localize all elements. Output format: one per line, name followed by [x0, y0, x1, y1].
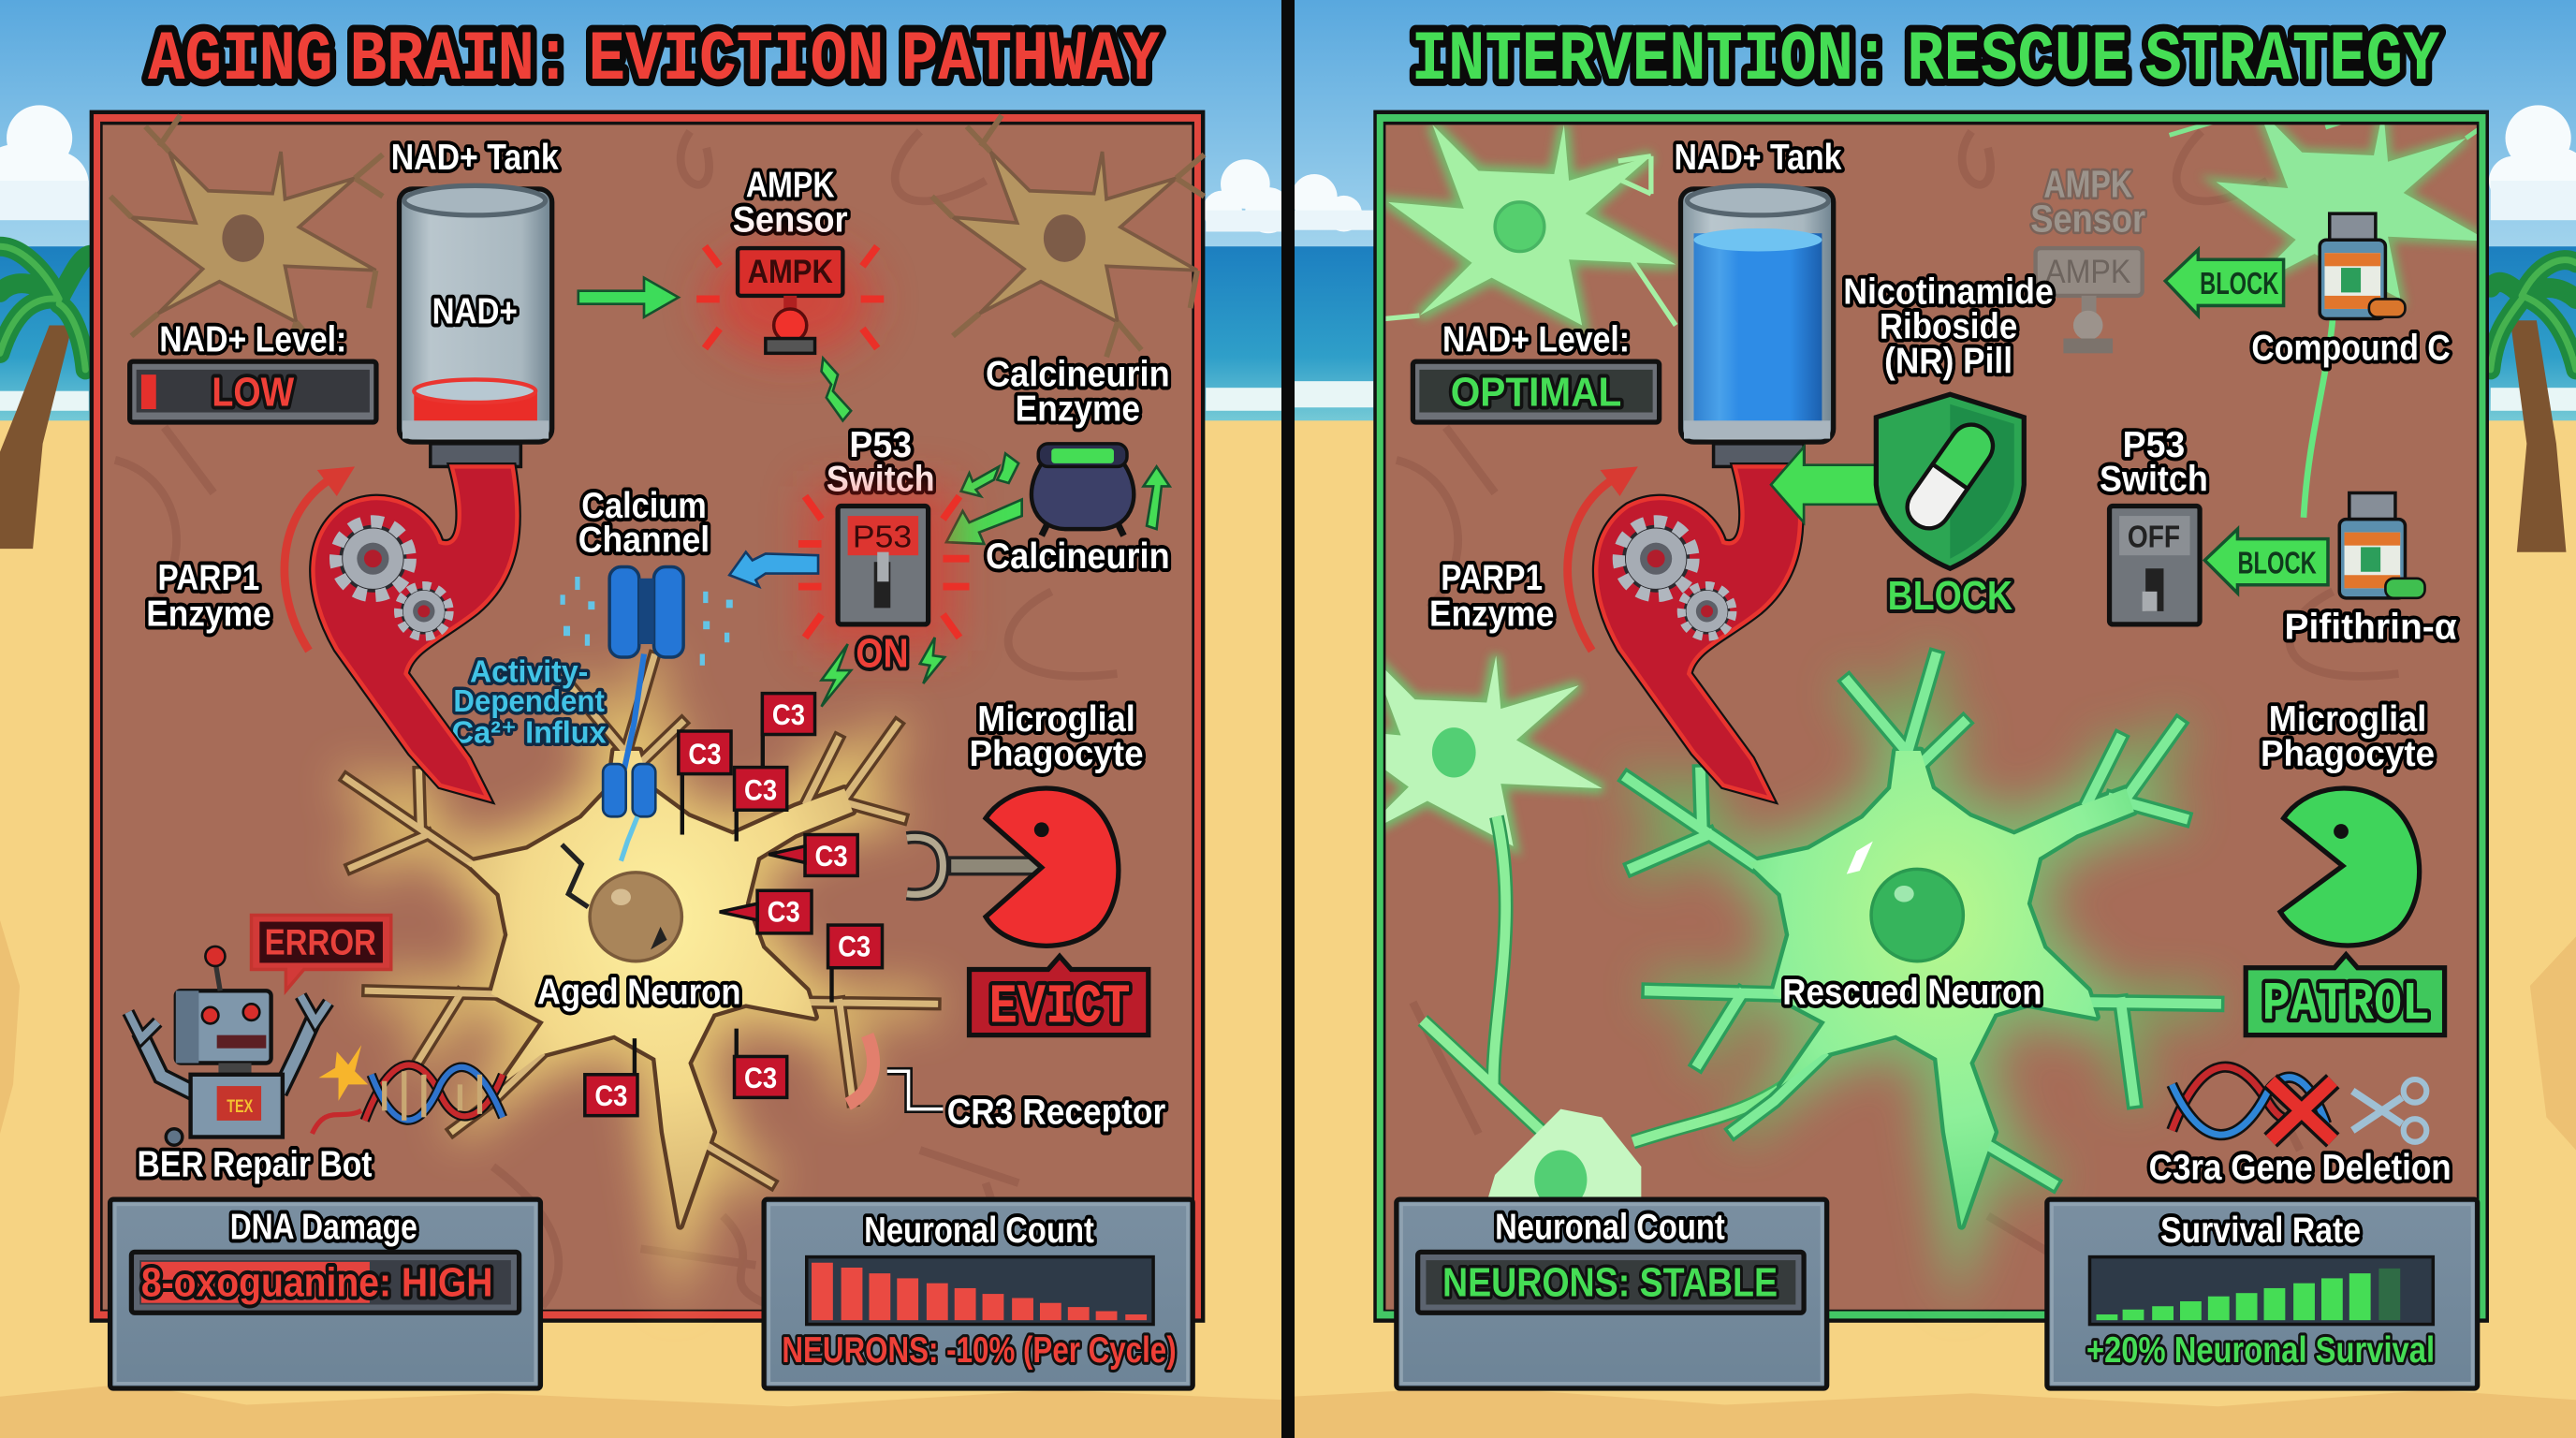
label: AMPK sensor inactive: AMPK: [2043, 163, 2132, 206]
faded neuron top right: [932, 115, 1204, 357]
faded neuron left: [43, 626, 324, 900]
label: ON: ON: [856, 631, 909, 677]
icon: C3ra gene deletion: [2172, 1067, 2426, 1142]
label: PARP1 enzyme: Enzyme: [146, 594, 271, 635]
label: activity-dependent calcium influx: [452, 654, 607, 750]
panel: DNA damage: DNA Damage: [230, 1207, 417, 1247]
icon: palm tree right: [2491, 260, 2576, 552]
C3 tags: C3: [838, 929, 871, 962]
panel frame: [1373, 110, 2489, 1323]
label: activity-dependent calcium influx: Activity-: [470, 654, 588, 689]
gauge: NAD+ optimal: [1412, 361, 1660, 422]
badge: error: [252, 916, 391, 990]
clouds: [0, 105, 2576, 233]
icon: BER repair bot: [128, 946, 368, 1145]
icon: CR3 receptor: [848, 1035, 943, 1109]
label: compound C: Compound C: [2251, 328, 2451, 368]
C3 tags: C3: [772, 697, 805, 731]
icons: lightning on: [822, 638, 944, 707]
label: nicotinamide riboside pill: Nicotinamide: [1843, 272, 2054, 313]
panel: survival rate: +20% Neuronal Survival: [2086, 1330, 2435, 1371]
label: PARP1 enzyme: [146, 558, 271, 635]
panel: DNA damage: [110, 1199, 540, 1388]
label: NAD+ tank: NAD+ Tank: [1674, 138, 1842, 178]
icon: P53 switch on: [798, 486, 970, 651]
label: nicotinamide riboside pill: Riboside: [1880, 307, 2017, 347]
label: nicotinamide riboside pill: (NR) Pill: [1884, 341, 2012, 381]
title: aging brain: AGING BRAIN: EVICTION PATHWAY: [148, 20, 1161, 100]
badge: patrol: PATROL: [2262, 975, 2430, 1035]
arrow: block AMPK: BLOCK: [2200, 267, 2278, 301]
icon: compound C bottle: [2320, 213, 2405, 318]
C3 tags: C3: [744, 1061, 777, 1094]
panel: neuronal count stable: Neuronal Count: [1495, 1207, 1725, 1247]
aged neuron: [346, 657, 935, 1225]
label: rescued neuron: Rescued Neuron: [1782, 972, 2042, 1012]
label: NAD+ tank: NAD+ Tank: [391, 138, 559, 178]
icon: PARP1 enzyme: [285, 466, 518, 799]
icon: microglia red: [986, 788, 1119, 946]
badge: evict: EVICT: [989, 976, 1131, 1039]
icon: AMPK sensor inactive: AMPK: [2045, 254, 2131, 290]
icon: pifithrin bottle: [2339, 493, 2425, 598]
label: calcium channel: Calcium: [581, 486, 707, 526]
panel: DNA damage: 8-oxoguanine: HIGH: [141, 1260, 493, 1306]
panel: neuronal count decline: NEURONS: -10% (Per Cycle): [782, 1330, 1177, 1371]
brain tissue cracks: [115, 131, 1117, 1306]
label: calcineurin enzyme: [986, 354, 1170, 429]
label: activity-dependent calcium influx: Ca²⁺ Influx: [452, 715, 607, 750]
icon: receptor in mouth: [907, 837, 1045, 894]
bar chart: declining neurons: [807, 1257, 1153, 1325]
arrow: block P53: [2204, 529, 2328, 594]
icon: palm tree left: [0, 246, 92, 549]
label: calcineurin: Calcineurin: [986, 536, 1170, 577]
panel: neuronal count decline: Neuronal Count: [864, 1211, 1094, 1251]
label: PARP1 enzyme: PARP1: [1441, 558, 1543, 598]
label: activity-dependent calcium influx: Dependent: [453, 684, 605, 719]
panel: aging brain eviction pathway: [43, 110, 1205, 1388]
label: AMPK sensor inactive: [2030, 163, 2145, 240]
icon: AMPK sensor active: AMPK: [748, 254, 833, 290]
label: PARP1 enzyme: PARP1: [157, 558, 259, 598]
icon: NAD+ tank full: [1680, 185, 1834, 466]
label: CR3 receptor: CR3 Receptor: [947, 1092, 1165, 1132]
icon: calcium channel: [560, 566, 733, 861]
panel: survival rate: Survival Rate: [2160, 1211, 2361, 1251]
panel: survival rate: [2047, 1199, 2478, 1388]
panel: neuronal count stable: [1397, 1199, 1827, 1388]
arrow: pill block: [1771, 447, 1880, 522]
label: NAD+ level: NAD+ Level:: [1442, 320, 1630, 360]
arrow: block P53: BLOCK: [2237, 547, 2317, 581]
label: block: BLOCK: [1888, 573, 2012, 619]
icon: NAD+ tank low: [399, 185, 552, 466]
rescued neuron: [1628, 657, 2217, 1225]
label: P53 switch: P53: [2123, 425, 2185, 465]
green neuron top right: [2170, 109, 2489, 518]
label: AMPK sensor inactive: Sensor: [2030, 197, 2145, 240]
label: calcineurin enzyme: Calcineurin: [986, 354, 1170, 394]
wave lines: [0, 381, 2576, 411]
C3 tags: C3: [594, 1078, 627, 1112]
icon: shield with NR pill: [1876, 394, 2024, 568]
icon: AMPK sensor inactive: [2036, 248, 2143, 353]
label: AMPK sensor: Sensor: [733, 199, 848, 240]
label: microglial phagocyte: Phagocyte: [970, 734, 1144, 774]
icon: calcineurin cauldron: [1032, 444, 1134, 536]
center divider: [1281, 0, 1295, 1438]
C3 tags: C3: [688, 737, 721, 770]
label: P53 switch: [827, 425, 935, 500]
label: microglial phagocyte: Phagocyte: [2261, 734, 2435, 774]
C3 tags: [585, 694, 882, 1116]
icon: lightning AMPK to P53: [822, 359, 851, 420]
arrows: calcineurin to P53: [946, 453, 1170, 544]
icon: PARP1 enzyme: [1568, 466, 1800, 799]
label: BER repair bot: BER Repair Bot: [138, 1145, 373, 1185]
brain tissue cracks: [1397, 131, 2398, 1306]
arrow: block AMPK: [2165, 250, 2284, 315]
green neuron left: [1385, 650, 1608, 858]
label: aged neuron: Aged Neuron: [537, 972, 741, 1012]
label: AMPK sensor: AMPK: [746, 166, 835, 206]
label: calcineurin enzyme: Enzyme: [1016, 389, 1140, 429]
icon: P53 switch off: OFF: [2128, 520, 2180, 554]
badge: evict: [970, 956, 1149, 1039]
label: microglial phagocyte: Microglial: [977, 699, 1135, 740]
label: AMPK sensor: [733, 166, 848, 240]
C3 tags: C3: [744, 773, 777, 807]
label: PARP1 enzyme: Enzyme: [1429, 594, 1554, 635]
panel: intervention rescue strategy: [1329, 109, 2489, 1388]
C3 tags: C3: [768, 895, 800, 929]
arrow: P53 to calcium channel: [729, 552, 818, 587]
gauge: NAD+ optimal: OPTIMAL: [1451, 369, 1621, 415]
label: calcium channel: [578, 486, 710, 561]
panel: neuronal count decline: [764, 1199, 1193, 1388]
label: PARP1 enzyme: [1429, 558, 1554, 635]
arrow: tank to AMPK: [578, 278, 679, 317]
bar chart: survival: [2089, 1257, 2433, 1325]
label: NAD+ in tank: NAD+: [432, 292, 518, 332]
label: nicotinamide riboside pill: [1843, 272, 2054, 381]
label: pifithrin-alpha: Pifithrin-α: [2284, 608, 2457, 648]
label: NAD+ level: NAD+ Level:: [159, 320, 346, 360]
label: microglial phagocyte: [970, 699, 1144, 774]
green neuron top left: [1385, 125, 1676, 325]
label: P53 switch: [2100, 425, 2208, 500]
faded neuron top left: [110, 115, 383, 357]
badge: patrol: [2246, 955, 2445, 1035]
label: P53 switch: Switch: [2100, 460, 2208, 500]
label: P53 switch: P53: [849, 425, 912, 465]
label: microglial phagocyte: [2261, 699, 2435, 774]
icon: P53 switch on: P53: [853, 520, 912, 554]
icon: DNA damaged: [312, 1065, 503, 1134]
icon: P53 switch off: [2110, 506, 2200, 624]
label: microglial phagocyte: Microglial: [2269, 699, 2426, 740]
icon: microglia eye: [2334, 824, 2349, 839]
icon: microglia green: [2280, 788, 2420, 946]
icon: BER repair bot: TEX: [227, 1097, 253, 1117]
icon: AMPK sensor active: [696, 244, 884, 357]
panel frame: [90, 110, 1205, 1323]
icon: microglia eye: [1034, 822, 1049, 837]
gauge: NAD+ low: LOW: [212, 369, 295, 415]
gauge: NAD+ low: [130, 361, 376, 422]
C3 tags: C3: [815, 839, 848, 873]
background: beach scene right: [1292, 0, 2576, 1438]
label: C3ra gene deletion: C3ra Gene Deletion: [2149, 1148, 2452, 1188]
green neuron lower left: [1423, 816, 1797, 1210]
label: calcium channel: Channel: [578, 521, 710, 561]
panel: neuronal count stable: NEURONS: STABLE: [1442, 1260, 1778, 1306]
label: P53 switch: Switch: [827, 460, 935, 500]
badge: error: ERROR: [265, 923, 376, 963]
background: beach scene left: [0, 0, 1284, 1438]
title: intervention: INTERVENTION: RESCUE STRATEGY: [1412, 20, 2440, 100]
